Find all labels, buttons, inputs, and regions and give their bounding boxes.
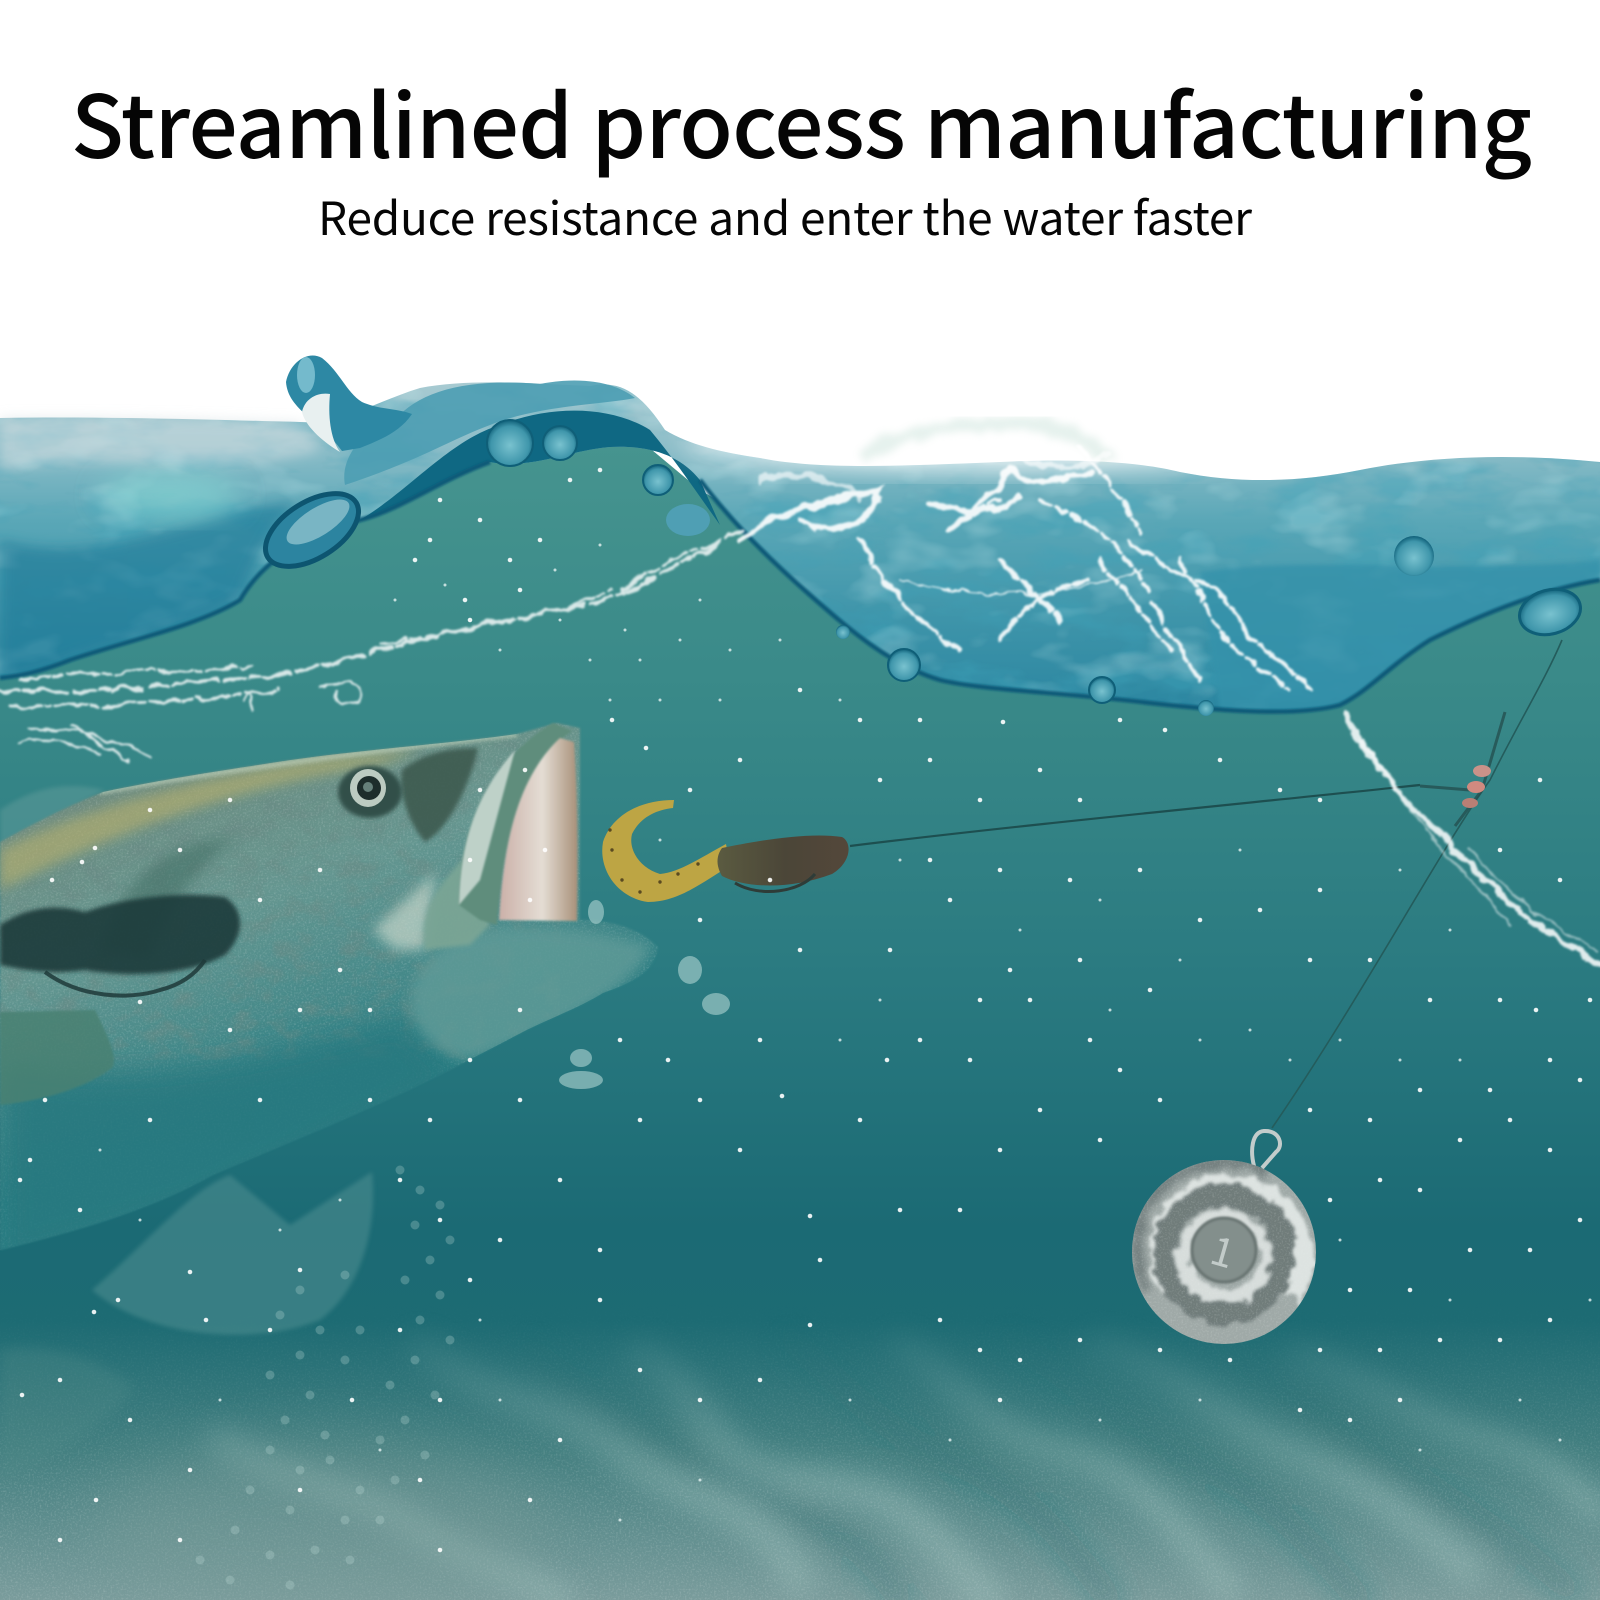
small bubbles beside jaw <box>559 900 730 1089</box>
fish head ridge highlight <box>100 734 517 792</box>
lure: yellow grub <box>602 800 849 902</box>
lure shadow on fish <box>0 895 240 996</box>
sinker centre <box>1192 1218 1256 1282</box>
wave fold shadows <box>0 380 1600 720</box>
foam across right wave <box>740 450 1310 690</box>
wave right lower tone <box>1200 560 1600 715</box>
lure hook <box>735 874 815 892</box>
sinker inner bright ring <box>1183 1215 1265 1297</box>
spray: white water streaks <box>0 450 1600 965</box>
surface bubbles <box>253 420 1586 716</box>
streak across left water <box>0 530 740 760</box>
fish upper lip <box>459 723 572 925</box>
fish inner mouth side <box>424 860 490 950</box>
panel: underwater scene <box>0 355 1600 1600</box>
seabed fog under the fish <box>90 1440 550 1600</box>
fishing line from lure <box>850 785 1420 846</box>
wave upper-left haze <box>0 417 320 470</box>
wave lower-left deep tone <box>0 500 300 678</box>
sinker outer bright ring <box>1160 1184 1304 1296</box>
rising bubble column <box>200 1170 450 1585</box>
water specks <box>20 470 1590 1550</box>
wave main body <box>0 382 1600 712</box>
splash finger <box>286 355 412 451</box>
sinker body <box>1132 1160 1316 1344</box>
lure specks <box>610 830 698 892</box>
fish: largemouth bass <box>0 720 680 1480</box>
wave fold highlights <box>0 398 1600 697</box>
fish dorsal fin <box>0 786 105 850</box>
fish back olive shading <box>0 750 420 890</box>
sinker number: 1 <box>1205 1218 1242 1280</box>
streak on right side <box>1345 712 1600 965</box>
swivel and beads <box>1420 712 1505 826</box>
foam fade at the wave top <box>685 416 1285 468</box>
sinker eyelet <box>1252 1131 1280 1168</box>
fish eye <box>338 766 402 818</box>
wave crest dark band <box>360 411 720 525</box>
fish mottled skin <box>0 932 457 1060</box>
fish gill plate shadow <box>121 836 228 902</box>
sinker <box>1130 1131 1320 1348</box>
fishing line to sinker <box>1272 640 1562 1128</box>
sinker rim shade <box>1137 1163 1268 1290</box>
fish head and body <box>0 723 658 1250</box>
fish lower jaw <box>412 927 650 1060</box>
water body background <box>0 440 1600 1600</box>
fish tail shadow <box>0 1348 135 1480</box>
small faint specks <box>100 545 1590 1520</box>
wave light patch <box>100 473 240 517</box>
fish mouth interior <box>499 738 578 921</box>
fish head dark patch <box>401 748 478 842</box>
fish pectoral fin <box>0 1010 114 1105</box>
subtitle: Reduce resistance and enter the water faster <box>318 183 1252 249</box>
sinker dark ring <box>1164 1194 1284 1314</box>
lure tail <box>602 800 730 902</box>
title: Streamlined process manufacturing <box>71 58 1532 184</box>
wave crest hump <box>344 381 635 485</box>
fish throat light <box>373 872 436 950</box>
panel: sandy seabed <box>0 1332 1600 1600</box>
wave: surface water layer <box>0 355 1600 720</box>
fish ventral fin <box>92 1172 373 1335</box>
fish belly tone <box>0 1020 470 1270</box>
lure body <box>718 835 849 886</box>
wave lower edge line <box>0 462 1600 712</box>
